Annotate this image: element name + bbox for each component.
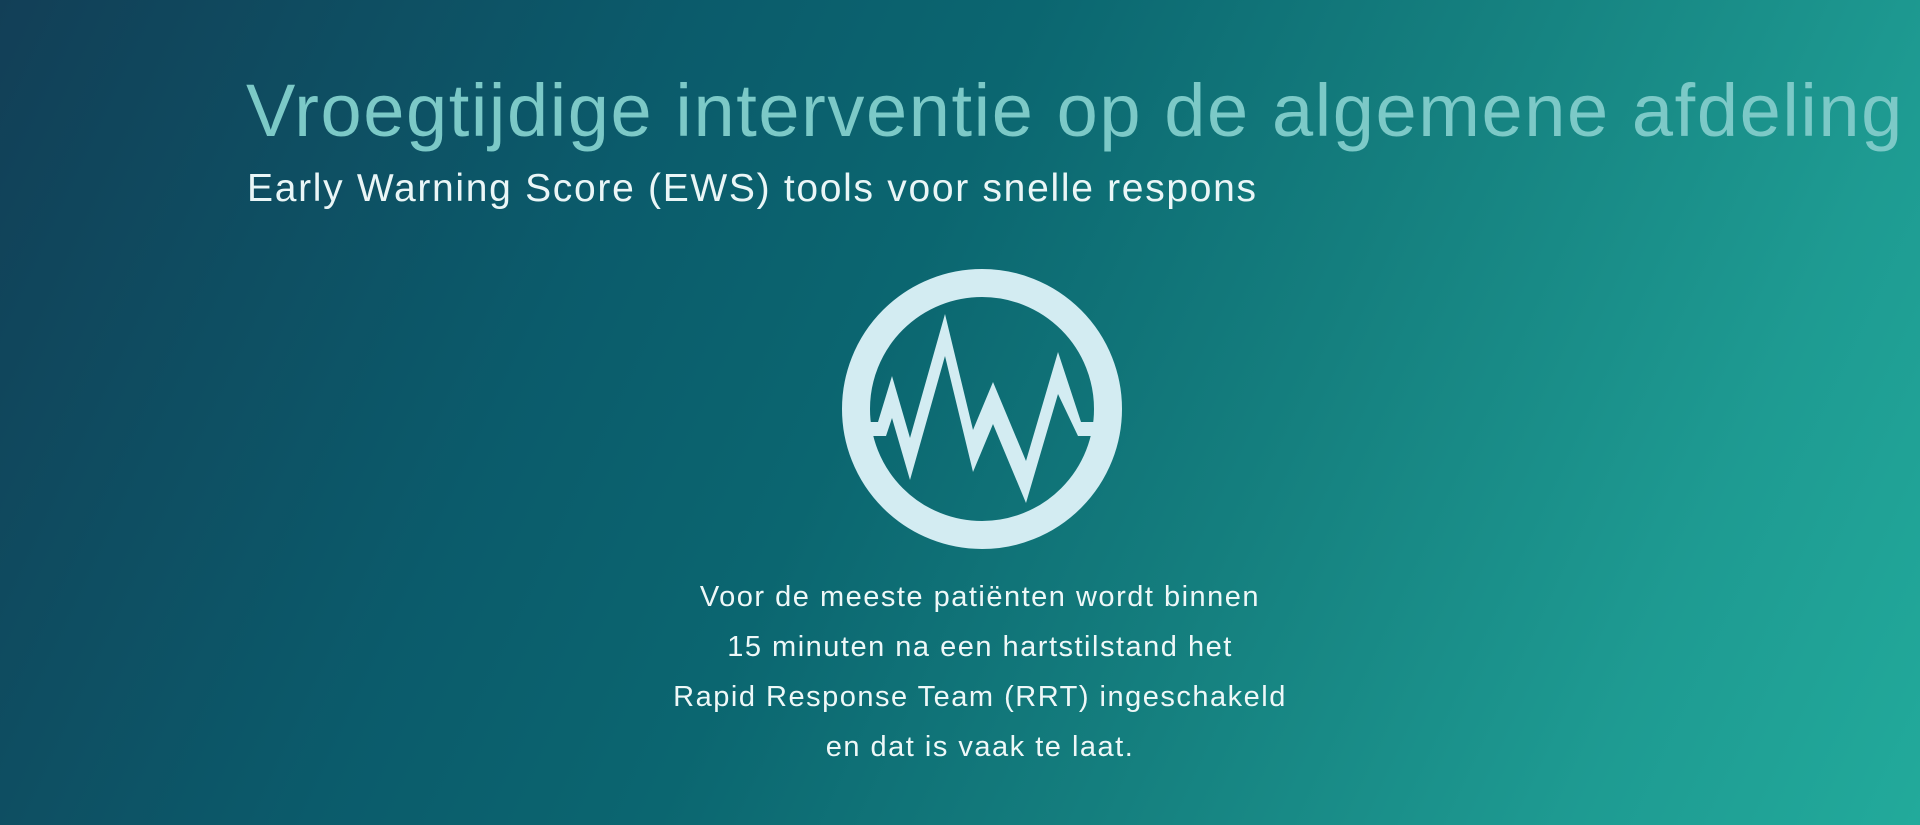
icon: heartbeat in circle [842,269,1122,549]
body text: Rapid Response Team (RRT) ingeschakeld [673,681,1287,713]
body text [673,581,1287,763]
body text: Voor de meeste patiënten wordt binnen [700,581,1260,613]
title: Vroegtijdige interventie op de algemene afdeling [246,69,1904,152]
subtitle: Early Warning Score (EWS) tools voor snelle respons [247,167,1258,210]
body text: en dat is vaak te laat. [826,731,1134,763]
body text: 15 minuten na een hartstilstand het [727,631,1233,663]
